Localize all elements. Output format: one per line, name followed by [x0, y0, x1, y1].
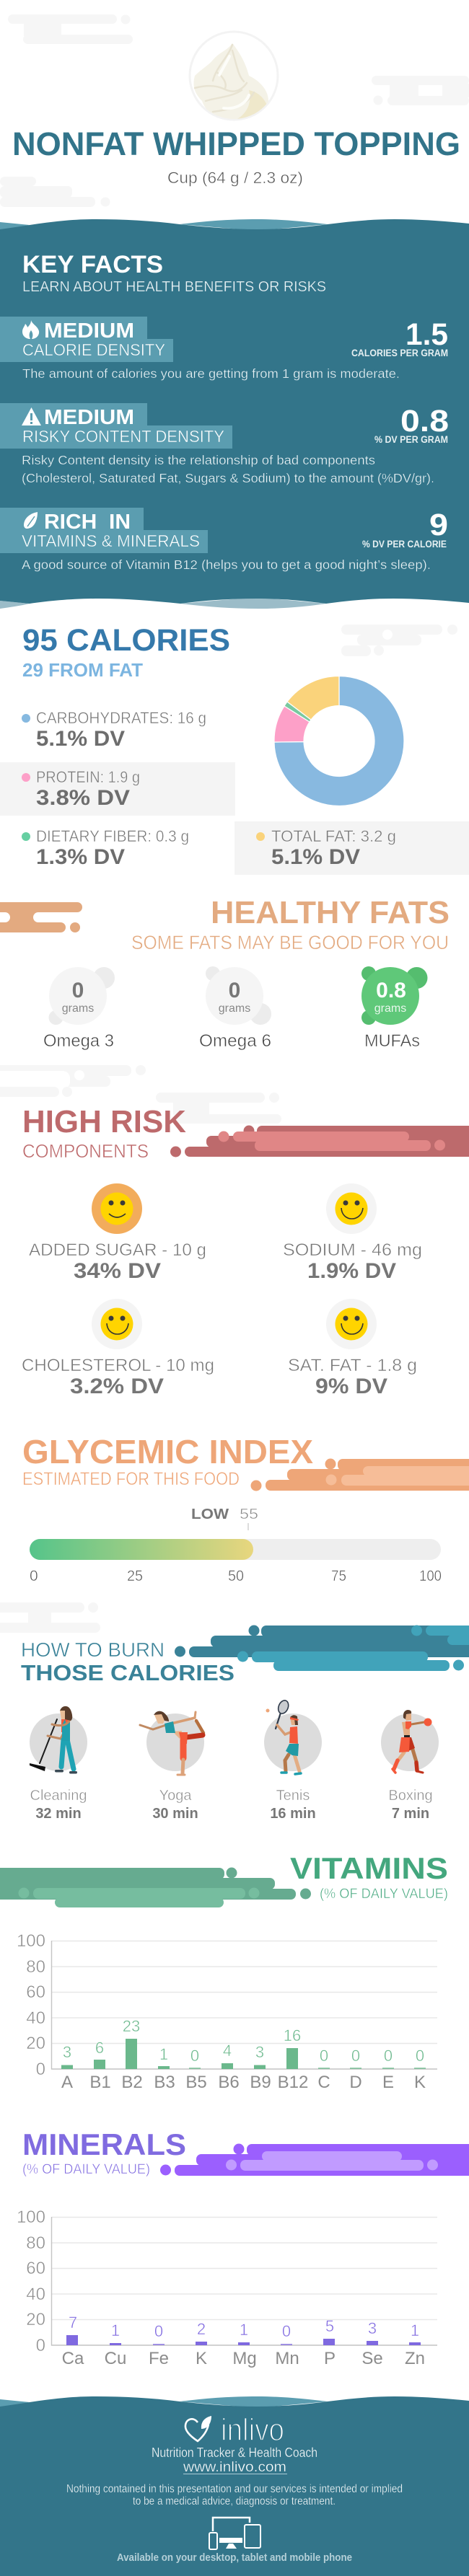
legend: carbohydrates: 5.1% DV — [36, 727, 125, 751]
disclaimer: Nothing contained in this presentation and our services is intended or implied — [66, 2483, 403, 2495]
fact: risky content density — [0, 403, 449, 485]
subheading: ESTIMATED FOR THIS FOOD — [22, 1469, 240, 1489]
bar chart: vitamins: 1 — [159, 2045, 168, 2063]
item: cholesterol: CHOLESTEROL - 10 mg — [22, 1356, 214, 1375]
heading line 1: HOW TO BURN — [21, 1638, 165, 1661]
icon: leaf — [24, 512, 38, 529]
panel: healthy fats — [0, 895, 450, 1051]
item: cholesterol — [22, 1299, 214, 1398]
bar chart: vitamins: C — [317, 2073, 330, 2092]
gauge label: 55 — [240, 1507, 258, 1522]
item: omega 3 — [43, 967, 115, 1051]
item: mufas: MUFAs — [364, 1031, 420, 1051]
bar chart: minerals: Fe — [149, 2349, 169, 2368]
gauge bar — [30, 1539, 441, 1560]
bar chart: vitamins: 23 — [123, 2017, 140, 2035]
icon: flame — [22, 320, 39, 339]
gauge scale: 100 — [419, 1568, 442, 1584]
bar chart: minerals: Zn — [405, 2349, 425, 2368]
item: omega 3: 0 — [72, 979, 84, 1002]
panel: minerals — [17, 2127, 469, 2368]
legend: carbohydrates — [22, 709, 206, 751]
bar chart: minerals: Se — [361, 2349, 383, 2368]
fact: rich in vitamins and minerals — [0, 508, 448, 572]
item: saturated fat: 9% DV — [315, 1375, 387, 1398]
logo: inlivo — [185, 2412, 284, 2448]
item: added sugar: 34% DV — [74, 1259, 161, 1283]
panel: glycemic index — [22, 1433, 469, 1584]
activity labels — [30, 1788, 433, 1822]
bar chart: vitamins: 0 — [320, 2047, 328, 2065]
bar chart: vitamins: E — [382, 2073, 394, 2092]
tagline: Nutrition Tracker & Health Coach — [152, 2445, 317, 2460]
bar chart: minerals: 0 — [154, 2322, 163, 2340]
bar chart: minerals: 7 — [69, 2313, 77, 2332]
description: (Cholesterol, Saturated Fat, Sugars & Sodium) to the amount (%DV/gr). — [22, 471, 434, 485]
legend: total fat — [234, 821, 469, 875]
level label: RICH IN — [44, 511, 131, 534]
banner shape — [251, 1458, 469, 1491]
subheading: (% OF DAILY VALUE) — [320, 1887, 448, 1902]
gauge label — [191, 1507, 258, 1530]
heading: key facts: KEY FACTS — [22, 251, 163, 278]
item: mufas — [361, 966, 427, 1051]
item: sodium: SODIUM - 46 mg — [283, 1240, 422, 1260]
legend: dietary fiber — [22, 827, 189, 869]
donut chart — [274, 676, 404, 806]
bar chart: vitamins: B2 — [121, 2073, 143, 2092]
subheading: COMPONENTS — [22, 1140, 149, 1162]
bar chart: minerals: 80 — [26, 2233, 45, 2253]
bar chart: minerals: 3 — [368, 2319, 377, 2337]
heading: HEALTHY FATS — [211, 895, 450, 930]
legend: protein — [0, 762, 235, 816]
bar chart: vitamins: 20 — [26, 2034, 45, 2053]
bar chart: minerals: 20 — [26, 2310, 45, 2329]
legend: dietary fiber: DIETARY FIBER: 0.3 g — [36, 827, 189, 845]
item: omega 6: 0 — [229, 979, 240, 1002]
bar chart: vitamins: 40 — [26, 2008, 45, 2028]
bar chart: minerals: 60 — [26, 2259, 45, 2278]
bar chart: vitamins: 60 — [26, 1982, 45, 2002]
value: 0.8 — [400, 404, 449, 438]
gauge scale — [30, 1568, 442, 1584]
serving size: Cup (64 g / 2.3 oz) — [167, 169, 303, 187]
activity labels: 7 min — [392, 1806, 429, 1822]
legend: protein: PROTEIN: 1.9 g — [36, 768, 140, 786]
panel: footer — [0, 2396, 469, 2576]
bar chart: vitamins: B5 — [185, 2073, 207, 2092]
bar chart: vitamins: 0 — [36, 2060, 45, 2079]
bar chart: vitamins: B3 — [154, 2073, 175, 2092]
unit: CALORIES PER GRAM — [351, 348, 448, 358]
activity: yoga — [140, 1711, 204, 1775]
subheading: SOME FATS MAY BE GOOD FOR YOU — [131, 932, 449, 953]
website link: www.inlivo.com — [183, 2460, 286, 2475]
item: saturated fat: SAT. FAT - 1.8 g — [288, 1356, 417, 1375]
description: The amount of calories you are getting from 1 gram is moderate. — [22, 366, 400, 381]
item: added sugar: ADDED SUGAR - 10 g — [29, 1240, 206, 1260]
value: 9 — [429, 508, 448, 542]
item: omega 6: Omega 6 — [199, 1031, 271, 1051]
subheading: from fat: 29 FROM FAT — [22, 659, 143, 681]
activity labels: 16 min — [270, 1806, 316, 1822]
bar chart: minerals: 2 — [197, 2320, 206, 2338]
icon: warning triangle — [22, 407, 41, 425]
panel: vitamins — [0, 1851, 448, 2092]
bar chart: vitamins: D — [349, 2073, 362, 2092]
level label: MEDIUM — [44, 319, 134, 343]
legend: total fat: TOTAL FAT: 3.2 g — [271, 827, 396, 845]
banner shape — [0, 1868, 311, 1907]
item: omega 6 — [199, 966, 271, 1051]
bar chart: vitamins: 3 — [63, 2043, 71, 2061]
legend: protein: 3.8% DV — [36, 786, 130, 810]
gauge scale: 25 — [127, 1568, 143, 1584]
category label: CALORIE DENSITY — [22, 340, 165, 359]
banner shape — [175, 1626, 469, 1671]
heading: VITAMINS — [290, 1851, 448, 1885]
bar chart: vitamins: B1 — [89, 2073, 111, 2092]
bar chart: vitamins: 80 — [26, 1957, 45, 1977]
banner shape — [170, 1125, 469, 1157]
subheading: (% OF DAILY VALUE) — [22, 2162, 150, 2177]
title: NONFAT WHIPPED TOPPING — [12, 125, 460, 162]
availability note: Available on your desktop, tablet and mobile phone — [117, 2551, 352, 2564]
panel: how to burn those calories — [21, 1626, 469, 1822]
activity labels: Tenis — [276, 1788, 310, 1804]
bar chart: minerals: 1 — [240, 2321, 248, 2339]
gauge scale: 0 — [30, 1568, 38, 1584]
bar chart: vitamins: 0 — [190, 2047, 199, 2065]
bar chart: vitamins: 0 — [351, 2047, 360, 2065]
bar chart: minerals — [17, 2207, 437, 2368]
bar chart: vitamins: 6 — [95, 2039, 104, 2057]
activity labels: 32 min — [35, 1806, 82, 1822]
panel: key facts — [0, 219, 469, 609]
panel: calories — [0, 623, 469, 875]
bar chart: minerals: 40 — [26, 2285, 45, 2304]
disclaimer: to be a medical advice, diagnosis or treatment. — [133, 2495, 336, 2507]
activity labels: Cleaning — [30, 1788, 87, 1804]
activity: tennis — [264, 1699, 322, 1774]
bar chart: minerals: 5 — [325, 2317, 334, 2335]
item: sodium — [283, 1183, 422, 1283]
item: added sugar — [29, 1183, 206, 1283]
heading: MINERALS — [22, 2127, 186, 2161]
food photo: whipped topping in circle — [190, 32, 278, 120]
gauge scale: 75 — [331, 1568, 346, 1584]
heading line 2: THOSE CALORIES — [21, 1660, 234, 1685]
bar chart: vitamins: 100 — [17, 1931, 45, 1951]
bar chart: vitamins: 0 — [384, 2047, 393, 2065]
bar chart: vitamins: B9 — [250, 2073, 271, 2092]
description: Risky Content density is the relationship of bad components — [22, 453, 375, 467]
logo: inlivo: inlivo — [221, 2412, 284, 2448]
bar chart: minerals: Mg — [232, 2349, 257, 2368]
disclaimer — [66, 2483, 403, 2507]
item: omega 3: Omega 3 — [43, 1031, 114, 1051]
bar chart: minerals: 100 — [17, 2207, 45, 2227]
item: mufas: grams — [374, 1002, 406, 1015]
banner shape — [160, 2143, 469, 2176]
activity labels: 30 min — [152, 1806, 198, 1822]
level label: MEDIUM — [44, 406, 134, 429]
description: A good source of Vitamin B12 (helps you to get a good night’s sleep). — [22, 557, 431, 572]
bar chart: vitamins: 16 — [284, 2026, 301, 2045]
legend: dietary fiber: 1.3% DV — [36, 845, 125, 869]
category label: RISKY CONTENT DENSITY — [22, 427, 224, 446]
unit: % DV PER CALORIE — [362, 539, 447, 550]
bar chart: vitamins: B12 — [278, 2073, 308, 2092]
panel: high risk components — [22, 1104, 469, 1398]
item: mufas: 0.8 — [376, 979, 406, 1002]
banner shape — [0, 902, 82, 932]
activity labels: Boxing — [388, 1788, 433, 1804]
heading: HIGH RISK — [22, 1104, 186, 1139]
bar chart: vitamins: 0 — [416, 2047, 424, 2065]
bar chart: minerals: 1 — [111, 2321, 120, 2339]
value: 1.5 — [406, 317, 448, 352]
activity: boxing — [381, 1710, 439, 1773]
description — [22, 453, 434, 485]
bar chart: minerals: Ca — [62, 2349, 84, 2368]
bar chart: minerals: K — [196, 2349, 207, 2368]
bar chart: vitamins: 3 — [255, 2043, 264, 2061]
item: saturated fat — [288, 1299, 417, 1398]
heading: calories: 95 CALORIES — [22, 623, 230, 658]
item: omega 6: grams — [219, 1002, 250, 1015]
item: omega 3: grams — [62, 1002, 94, 1015]
item: sodium: 1.9% DV — [307, 1259, 396, 1283]
heading: GLYCEMIC INDEX — [22, 1433, 313, 1470]
activity: cleaning — [30, 1706, 87, 1774]
unit: % DV PER GRAM — [374, 434, 448, 445]
bar chart: minerals: 1 — [411, 2321, 419, 2339]
bar chart: minerals: 0 — [282, 2322, 291, 2340]
item: cholesterol: 3.2% DV — [70, 1375, 164, 1398]
legend: carbohydrates: CARBOHYDRATES: 16 g — [36, 709, 206, 727]
bar chart: minerals: Cu — [105, 2349, 126, 2368]
gauge label: LOW — [191, 1507, 229, 1522]
gauge scale: 50 — [228, 1568, 244, 1584]
bar chart: vitamins: B6 — [218, 2073, 240, 2092]
bar chart: minerals: 0 — [36, 2336, 45, 2355]
legend: total fat: 5.1% DV — [271, 845, 360, 869]
bar chart: vitamins: 4 — [223, 2042, 232, 2060]
category label: VITAMINS & MINERALS — [22, 531, 200, 550]
bar chart: minerals: P — [324, 2349, 336, 2368]
fact: calorie density — [0, 317, 448, 381]
bar chart: vitamins: A — [61, 2073, 73, 2092]
icon: devices — [209, 2518, 260, 2549]
bar chart: vitamins: K — [414, 2073, 426, 2092]
activity labels: Yoga — [159, 1788, 192, 1804]
bar chart: minerals: Mn — [275, 2349, 299, 2368]
bar chart: vitamins — [17, 1931, 437, 2092]
subheading: LEARN ABOUT HEALTH BENEFITS OR RISKS — [22, 279, 326, 295]
